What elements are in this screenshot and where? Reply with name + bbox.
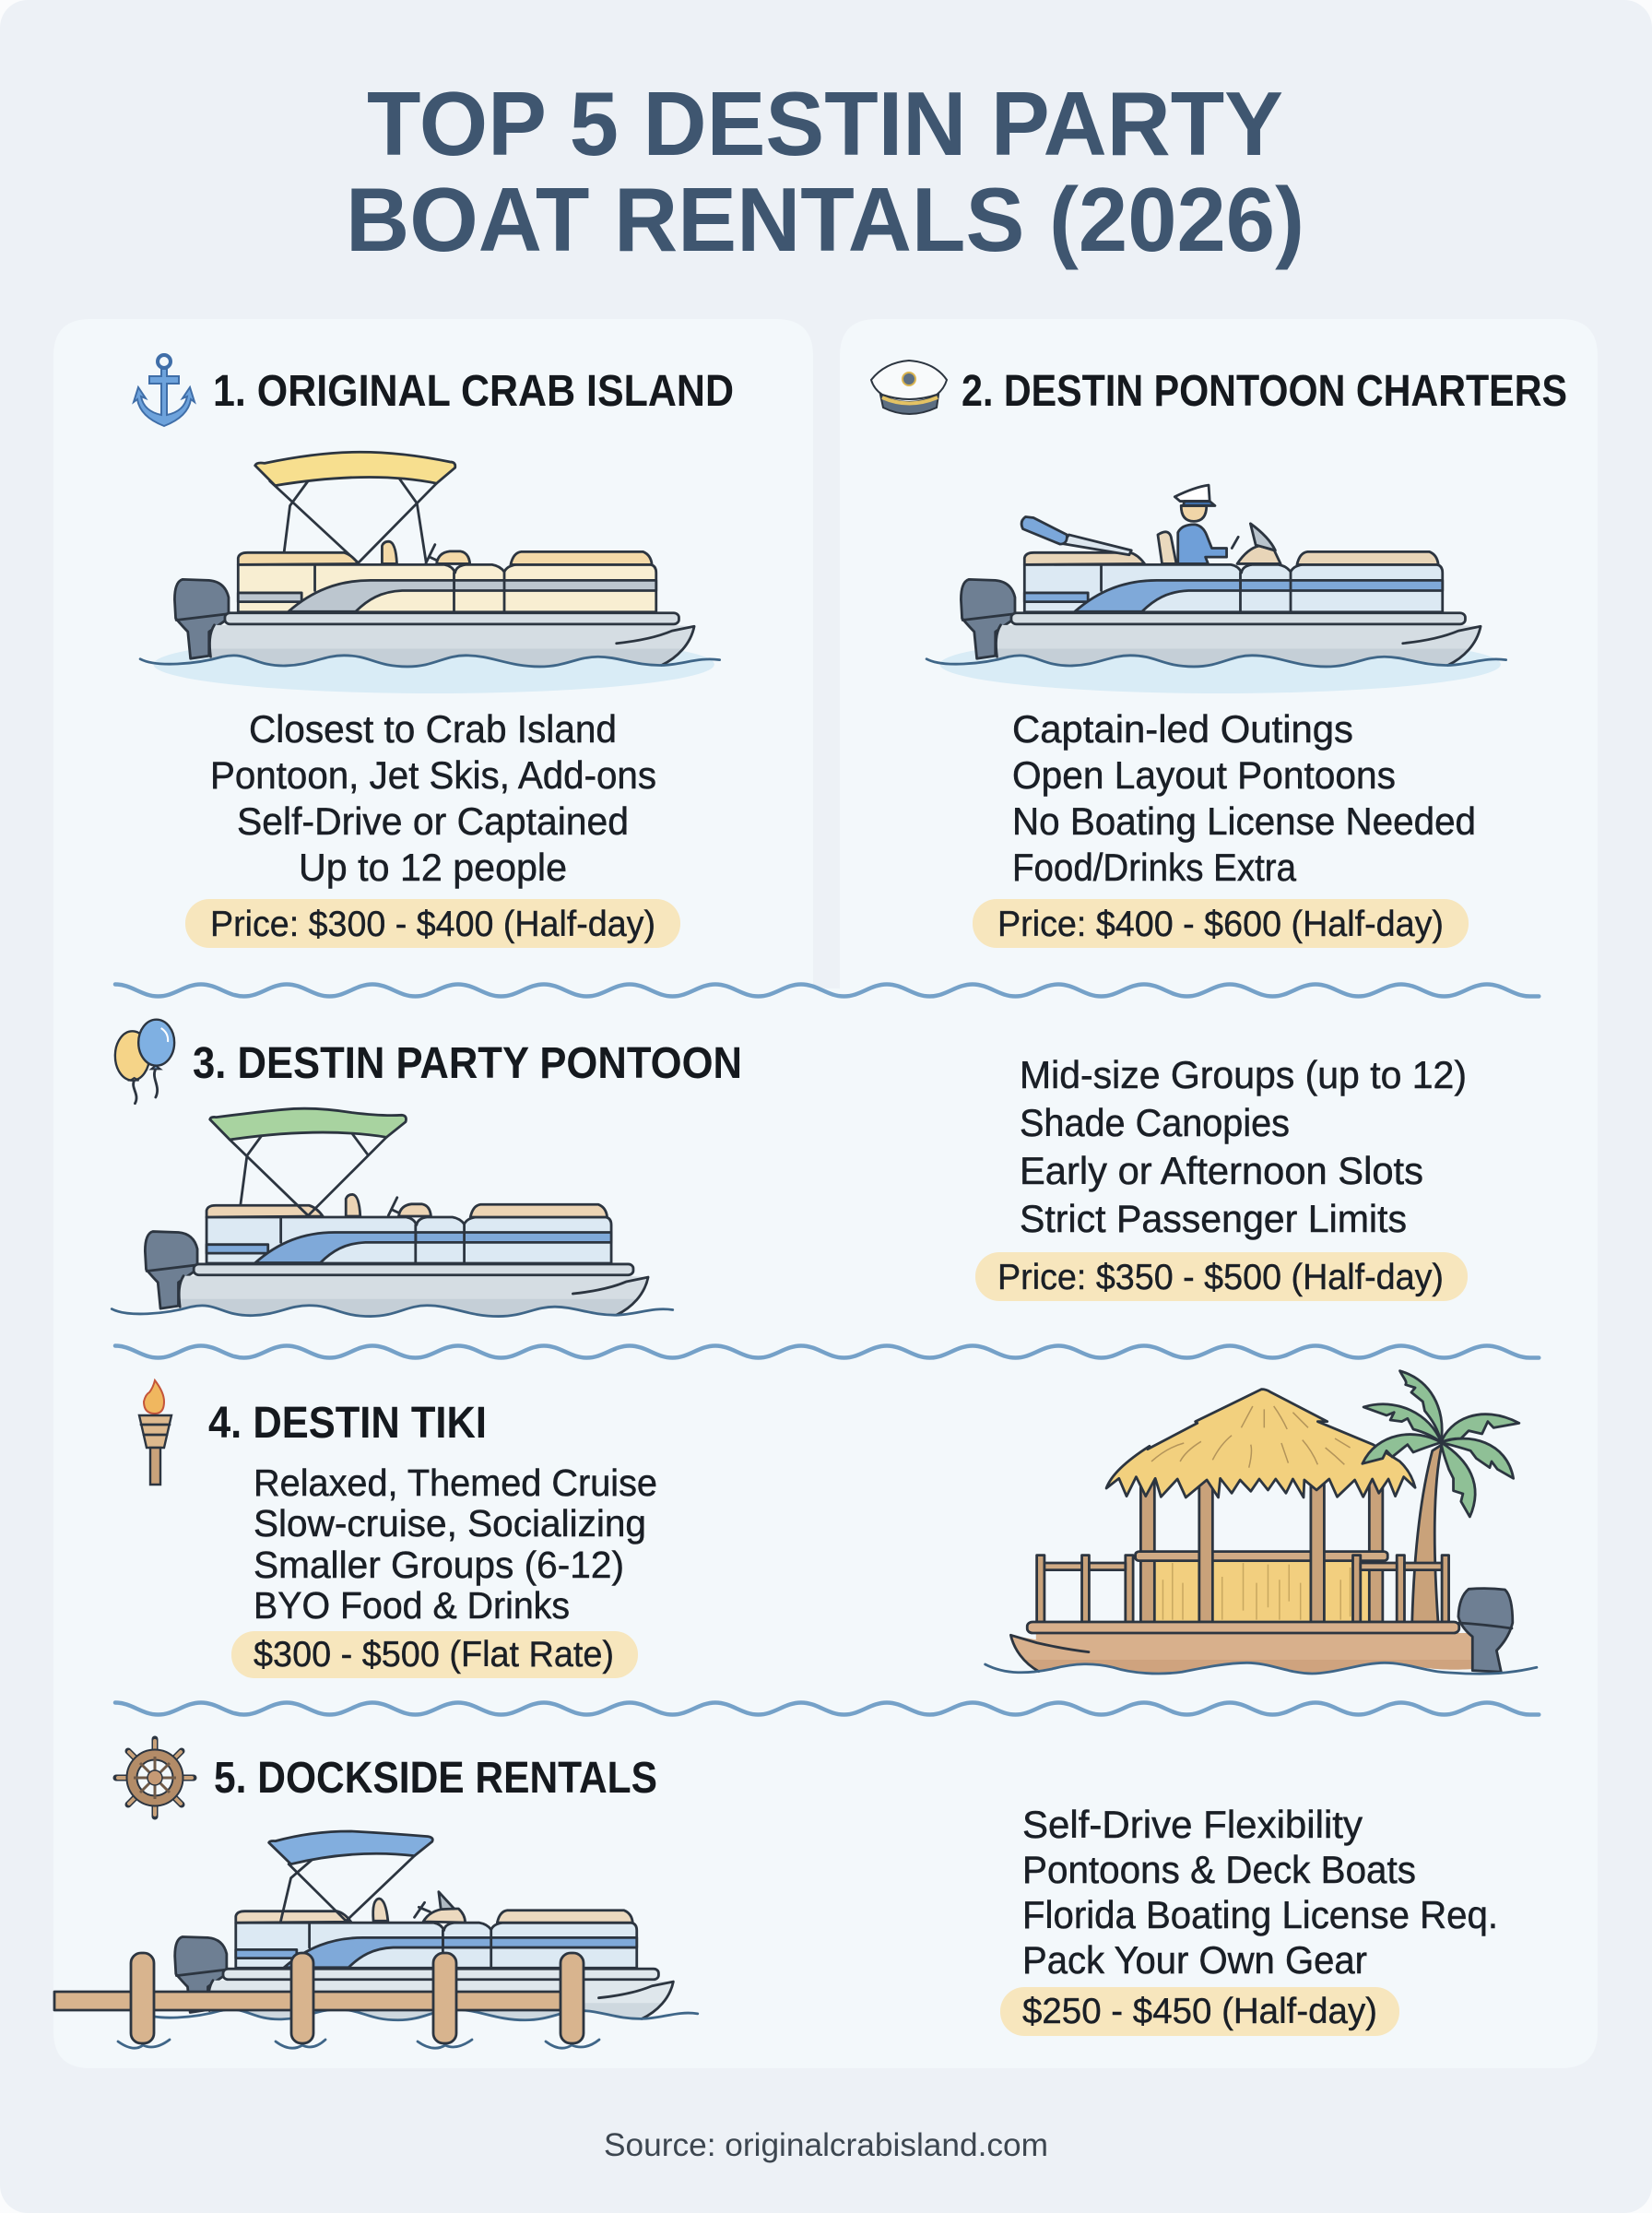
wave divider 2 xyxy=(115,1346,1539,1357)
text: features: Pontoon, Jet Skis, Add-ons xyxy=(210,753,656,797)
panel: destin pontoon charters xyxy=(840,319,1598,990)
text: features xyxy=(210,707,656,889)
heading: 4. destin tiki: 4. DESTIN TIKI xyxy=(208,1399,487,1448)
illustration: yellow canopy pontoon xyxy=(140,452,720,693)
text: features xyxy=(1012,707,1476,889)
text: features: Pontoons & Deck Boats xyxy=(1022,1848,1416,1891)
text: features: Slow-cruise, Socializing xyxy=(254,1502,646,1544)
text: features: Pack Your Own Gear xyxy=(1022,1938,1367,1982)
section: destin party pontoon xyxy=(112,1020,1468,1317)
price pill: Price: $300 - $400 (Half-day) xyxy=(210,905,655,944)
heading: 3. destin party pontoon: 3. DESTIN PARTY PONTOON xyxy=(193,1039,742,1088)
heading: 1. original crab island: 1. ORIGINAL CRAB ISLAND xyxy=(213,367,734,416)
text: features: Strict Passenger Limits xyxy=(1020,1197,1407,1240)
text: features: Open Layout Pontoons xyxy=(1012,753,1396,797)
text: features: Captain-led Outings xyxy=(1012,707,1353,751)
illustration: blue canopy pontoon at dock xyxy=(54,1831,698,2048)
icon: anchor xyxy=(134,355,195,426)
section: destin tiki xyxy=(139,1371,1537,1678)
title: BOAT RENTALS (2026) xyxy=(346,169,1304,270)
text: features: Self-Drive or Captained xyxy=(237,799,629,843)
text: features xyxy=(254,1462,657,1627)
illustration: green canopy pontoon xyxy=(112,1108,673,1317)
text: features: Smaller Groups (6-12) xyxy=(254,1544,624,1586)
text: features: No Boating License Needed xyxy=(1012,799,1476,843)
title xyxy=(346,73,1304,270)
section: dockside rentals xyxy=(54,1739,1498,2048)
text: features: Up to 12 people xyxy=(299,846,567,889)
text: features: Early or Afternoon Slots xyxy=(1020,1149,1423,1192)
price pill: Price: $400 - $600 (Half-day) xyxy=(997,905,1444,944)
price pill: $300 - $500 (Flat Rate) xyxy=(254,1635,614,1675)
title: TOP 5 DESTIN PARTY xyxy=(367,73,1283,174)
text: features: Food/Drinks Extra xyxy=(1012,846,1297,889)
icon: balloons xyxy=(115,1020,174,1104)
icon: tiki torch xyxy=(139,1380,171,1485)
text: features: Shade Canopies xyxy=(1020,1101,1290,1144)
source: Source: originalcrabisland.com xyxy=(604,2127,1048,2163)
illustration: pontoon with captain xyxy=(926,485,1506,693)
text: features: BYO Food & Drinks xyxy=(254,1584,570,1627)
text: features xyxy=(1020,1053,1467,1240)
price pill: $250 - $450 (Half-day) xyxy=(1022,1992,1377,2031)
icon: ship wheel xyxy=(116,1739,194,1817)
heading: 2. destin pontoon charters: 2. DESTIN PONTOON CHARTERS xyxy=(962,367,1567,416)
panel: lower rentals xyxy=(53,988,1598,2068)
text: features: Closest to Crab Island xyxy=(249,707,617,751)
text: features: Florida Boating License Req. xyxy=(1022,1893,1498,1936)
wave divider 1 xyxy=(115,985,1539,996)
panel: original crab island xyxy=(53,319,813,990)
text: features: Mid-size Groups (up to 12) xyxy=(1020,1053,1467,1096)
wave divider 3 xyxy=(115,1702,1539,1715)
icon: captain hat xyxy=(871,361,947,414)
heading: 5. dockside rentals: 5. DOCKSIDE RENTALS xyxy=(214,1754,657,1803)
illustration: tiki boat with palm xyxy=(985,1371,1537,1674)
text: features xyxy=(1022,1803,1498,1982)
text: features: Relaxed, Themed Cruise xyxy=(254,1462,657,1504)
price pill: Price: $350 - $500 (Half-day) xyxy=(997,1258,1444,1297)
text: features: Self-Drive Flexibility xyxy=(1022,1803,1363,1846)
dock xyxy=(54,1953,599,2048)
captain, console and folded canopy xyxy=(1021,485,1280,563)
